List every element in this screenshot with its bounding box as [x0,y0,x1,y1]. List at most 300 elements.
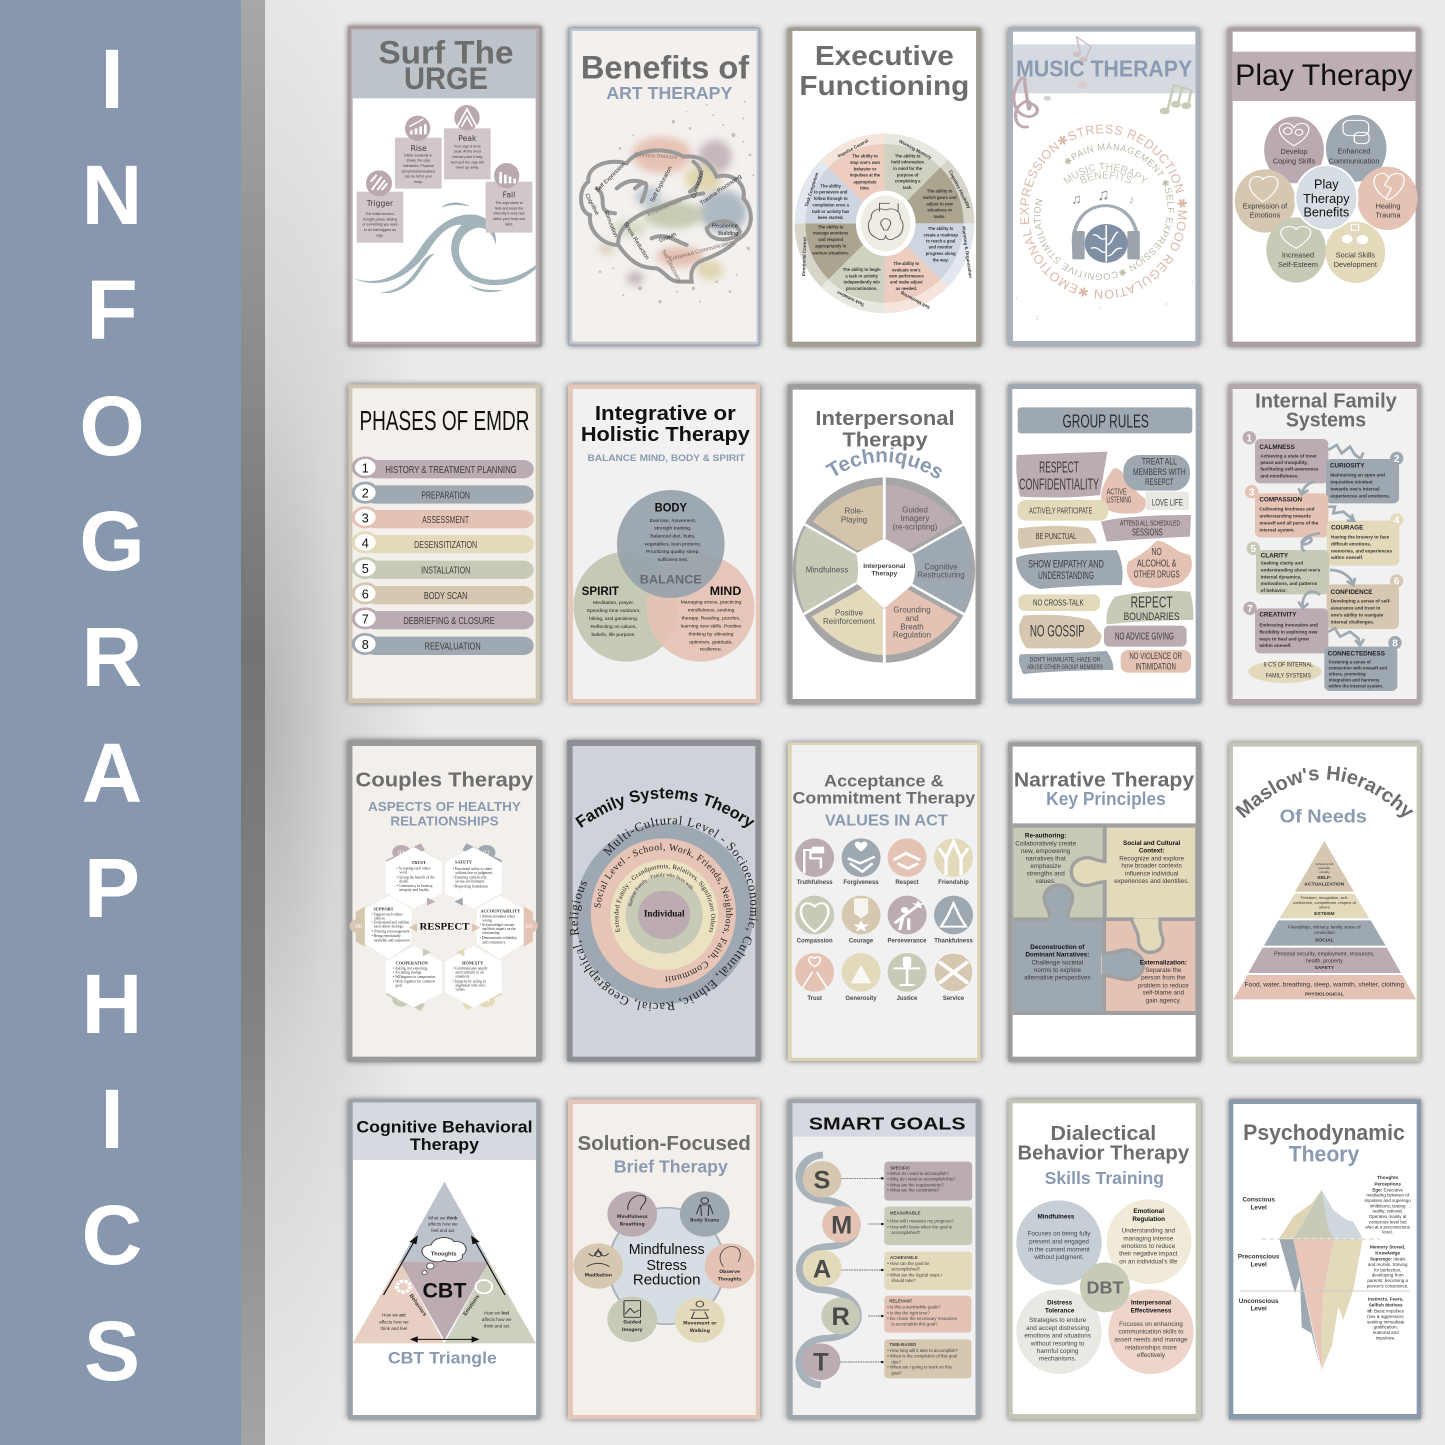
wheel labels: Reinforcement [823,617,876,626]
phase 2: PREPARATION [421,490,470,501]
box: time-based [884,1339,971,1378]
number badges: 4 [1394,516,1400,527]
wheel body text: The ability to [928,226,954,231]
triangle small text: think and feel [381,1326,407,1331]
icon: small notes: ♪ [1129,194,1134,206]
card: Maslow's Hierarchy [1224,738,1425,1066]
ego text: conscious level but [1369,1219,1407,1224]
puzzle [1013,823,1196,1015]
practice: meditation: Meditation [585,1272,612,1278]
box: curiosity: CURIOSITY [1330,463,1365,470]
step: Peak: never go away. [456,166,479,170]
box: confidence: one's ability to navigate [1331,612,1384,617]
hexagon text: and truthfully in all [455,970,484,974]
hexagon text: COOPERATION [395,960,429,965]
id text [1367,1297,1405,1340]
circular text: music therapy benefits: MUSIC THERAPY [1063,162,1148,184]
step: Fall: intensity it once had [494,212,524,216]
box: courage: Having the bravery to face [1331,535,1390,540]
venn: Spirit [573,552,679,662]
petal: Increased Self-Esteem: Self-Esteem [1278,260,1318,269]
puzzle text: re-authoring: new, empowering [1021,848,1071,855]
puzzle text: externalization: person from the [1141,975,1186,982]
hexagon text: • Understand and validate [371,921,410,925]
thought cloud [422,1238,466,1275]
sidebar vertical title INFOGRAPHICS: H [82,957,142,1051]
triangle small text: affects how we [379,1319,409,1324]
wheel body text: The ability to [927,188,953,193]
sidebar vertical title INFOGRAPHICS: N [82,148,142,242]
puzzle text: deconstruction: alternative perspectives [1024,975,1091,982]
wheel labels: Mindfulness [806,565,848,574]
card: Play Therapy [1228,28,1420,347]
phase 1 [353,458,534,478]
box: achievable: should take? [891,1278,916,1283]
triangle small text: How we feel [484,1310,509,1315]
central text: Mindfulness [629,1242,705,1258]
box: compassion: oneself and all parts of the [1259,521,1319,526]
wheel body text: The ability to [852,154,878,159]
step: Fall: fade and loses the [495,206,523,210]
brain labels: Enhanced Communication [669,240,734,263]
icon: headphones and brain [1072,206,1140,263]
number labels: 04 [483,997,490,1004]
ego text: reality; rational. [1372,1209,1403,1214]
brain outline [581,150,751,282]
hexagon text: alignment with one's [455,984,486,988]
title: Therapy [842,430,928,452]
petal: Healing Trauma [1357,167,1418,230]
practice: guided imagery: Guided [623,1319,641,1325]
wheel body text: adjust to new [926,201,954,206]
wheel segment labels: Self Monitoring [899,290,931,310]
subtitle: Theory [1289,1142,1360,1167]
wheel segment labels [801,138,973,310]
step: Peak [444,105,491,179]
hexagon text: • Work together for common [393,979,435,983]
puzzle text: re-authoring: strengths and [1026,870,1065,877]
superego text [1367,1245,1409,1288]
skill: distress tolerance: Tolerance [1045,1307,1075,1314]
icon: small notes: ♫ [1163,302,1168,308]
hexagon text: goal. [396,983,403,987]
title [799,40,969,101]
petal: Social Skills Development [1326,222,1385,283]
wheel body text: time. [860,185,870,190]
step: Trigger: Trigger [366,199,394,208]
box: specific: • What do I want to accomplish? [887,1171,949,1176]
hexagon text: • Accepting each others [396,866,431,870]
letter S [803,1161,884,1198]
card: Phases of EMDR [348,384,540,703]
title: Surf The Urge: URGE [404,61,488,96]
number badges: 1 [1247,433,1253,444]
hexagon text: situations. [455,975,470,979]
skill: distress tolerance: and accept distressing [1026,1325,1090,1332]
superego text: and morals. Striving [1368,1262,1408,1267]
card: Music Therapy [1002,24,1205,350]
rule: respect boundaries [1106,591,1193,624]
connecting arrows [1298,445,1364,646]
ego text: Perceptions [1374,1181,1401,1186]
box: confidence: internal challenges. [1331,619,1374,624]
wheel segment labels: Planning & Organization [961,226,973,279]
wheel body text: various situations. [812,250,849,255]
circular text: inner ring: ✱PAIN MANAGEMENT ✱SELF EXPRESSION ✱COGNITIVE STIMULATION [1034,143,1174,280]
icon: brain and bulb [868,203,903,240]
box: clarity: motivations, and patterns [1261,581,1318,586]
box: compassion: COMPASSION [1259,497,1303,504]
box: calmness [1255,439,1328,483]
brain labels: Self Discovery [660,249,682,284]
sidebar vertical title INFOGRAPHICS: I [100,32,124,126]
rule: show empathy [1016,550,1123,589]
header bar [1018,407,1192,433]
box: measurable: • How will I know when the goal is [887,1224,952,1229]
pyramid labels: ESTEEM [1314,911,1335,917]
wheel body text: procrastination. [846,286,877,291]
box: time-based: • When am I going to work on this [887,1365,952,1370]
skill: emotional regulation: their negative impact [1119,1251,1178,1258]
card: Family Systems Theory [562,736,766,1066]
practice: guided imagery: Imagery [622,1327,643,1333]
petal: Social Skills Development: Social Skills [1336,250,1375,259]
rule: don't humiliate: DON'T HUMILIATE, HAZE OR [1030,657,1100,664]
practice: mindfulness breathing [607,1191,657,1237]
skill: distress tolerance [1016,1289,1102,1374]
superego text: for perfection, [1374,1267,1401,1272]
title: Holistic Therapy [581,424,750,446]
hexagon text: SUPPORT [374,907,394,912]
wheel body text: behavior or [854,166,877,171]
box: time-based: • When is the completion of this goal [887,1354,957,1359]
rule: active listening: LISTENING [1106,496,1131,505]
skill: interpersonal effectiveness: effectively [1137,1352,1166,1359]
sidebar vertical title INFOGRAPHICS: A [82,726,142,820]
central ellipse [609,1208,725,1324]
ego text: level. [1382,1230,1393,1235]
ego text [1364,1175,1411,1235]
number badges: 8 [1392,638,1398,649]
wheel body text: impulses at the [850,173,881,178]
hexagon text: • Ensuring a physically [453,876,487,880]
rule: be punctual [1018,526,1097,549]
id text: Instincts, Fears, [1368,1297,1403,1302]
number badges: 6 [1394,577,1400,588]
puzzle text: externalization: self-blame and [1143,990,1185,997]
number badges: 7 [1247,604,1253,615]
value icons row 1 [795,838,973,877]
practice: observe thoughts [705,1243,755,1289]
mind text: Managing stress, practicing [681,599,742,605]
title [581,403,750,446]
hexagon text: values. [455,988,466,992]
hexagon text: TRUST [411,860,426,865]
spirit text: Spending time outdoors, [587,608,641,614]
wheel body text: The ability to [895,154,921,159]
body text: strength training. [654,526,691,532]
box: specific: • What are the constraints? [887,1188,940,1193]
ring text: Nuclear Family - Family who lives with [628,872,693,907]
wheel labels: Therapy [871,571,898,578]
box: calmness: peace and tranquility, [1260,460,1308,465]
hexagon text: • Willingness to compromise. [393,975,436,979]
rule: be punctual: BE PUNCTUAL [1036,532,1077,541]
box: measurable [884,1207,972,1245]
central text [629,1242,705,1288]
skill: mindfulness: in the current moment [1028,1246,1090,1253]
center label: Individual [644,910,685,920]
paint dots [599,97,754,303]
brain labels: Stimulation [602,210,618,238]
box: curiosity: Maintaining an open and [1330,473,1385,478]
central text: Reduction [633,1272,700,1288]
hexagon text: integrity and loyalty. [399,888,430,892]
box: creativity: within oneself. [1258,643,1292,648]
arrow triangles [409,898,480,956]
phase 3: ASSESSMENT [422,515,469,526]
sidebar vertical title INFOGRAPHICS: F [86,263,138,357]
step: Trigger: or something you want [362,223,398,227]
title: Narrative Therapy [1014,769,1195,792]
wheel body text: purpose of [897,173,919,178]
triangle small text: think and act [484,1323,510,1328]
id text: (sex & aggression; [1367,1314,1404,1319]
petal: Healing Trauma: Trauma [1376,211,1401,220]
superego text: person's conscience. [1367,1283,1409,1288]
icon: small notes: ♫ [1034,315,1039,322]
petal: Develop Coping Skills: Coping Skills [1273,156,1316,165]
rule: respect confidentiality [1016,452,1107,498]
puzzle text: externalization: gain agency. [1146,997,1181,1004]
wheel body text: manage emotions [813,231,849,236]
sidebar vertical title INFOGRAPHICS: P [84,841,140,935]
mind text: mindfulness, seeking [688,607,734,613]
rule: active listening: ACTIVE [1107,487,1127,496]
id text: impulsive. [1376,1335,1396,1340]
phase 8: 8 [362,638,369,652]
rule: treat all members: TREAT ALL [1142,456,1177,466]
puzzle text: social context: experiences and identities. [1114,878,1189,885]
rule: actively participate [1017,500,1108,521]
balance label: BALANCE [640,572,702,586]
value labels row 2: Thankfulness [934,938,973,944]
rule: no cross-talk [1018,594,1100,611]
step: Rise: Rise [411,144,427,153]
box: clarity [1256,550,1329,594]
box: relevant: to accomplish this goal? [891,1322,938,1327]
serpentine ribbon [800,1155,858,1385]
wheel body text: The ability to [818,224,844,229]
pyramid labels: SELF- [1317,875,1332,881]
skill: emotional regulation: on an individual's life [1119,1258,1178,1265]
box: courage [1327,521,1399,566]
title: Surf The Urge [378,34,513,96]
step: Rise: Either suddenly or [404,153,433,157]
hexagon text: word. [399,871,408,875]
rule: no gossip [1019,615,1102,648]
puzzle knobs [1044,858,1163,980]
value labels row 1: Forgiveness [843,880,879,886]
box: creativity: Embracing innovation and [1259,622,1318,627]
letter T [801,1343,884,1380]
petal: Increased Self-Esteem: Increased [1282,250,1314,259]
letter A [803,1250,884,1287]
side labels: Emotions [462,1294,481,1317]
box: connectedness [1324,647,1397,691]
subtitle: Brief Therapy [614,1157,728,1177]
rule: no advice giving: NO ADVICE GIVING [1115,631,1174,642]
wheel labels: Restructuring [917,571,965,580]
footer label: 8 C'S OF INTERNAL [1264,662,1313,669]
petal: Enhanced Communication: Enhanced [1337,147,1371,156]
arrows [384,1237,505,1342]
practice: movement or walking: Walking [690,1328,710,1334]
step: Rise: intensifies. Physical [403,164,434,168]
hexagon text: SAFETY [455,859,473,864]
hexagon text: choices. [374,916,386,920]
title: Surf The Urge: Surf The [378,34,513,70]
phase 4: 4 [362,536,369,550]
wheel body text: evaluate one's [892,267,921,272]
mind text [681,584,742,653]
id text: Selfish Motives [1369,1303,1403,1308]
hexagon text: wrong. [482,918,493,922]
hexagon text: each others feelings. [374,925,404,929]
number labels: 01 [398,849,405,856]
title: Commitment Therapy [793,788,976,807]
CBT label: CBT [423,1278,466,1302]
venn: Body [617,490,725,598]
wheel body text: follow through to [814,196,848,201]
level labels: Level [1251,1306,1267,1313]
puzzle text: social context: Context: [1139,848,1165,855]
circular text: outer ring: ✱STRESS REDUCTION ✱MOOD REGULATION ✱EMOTIONAL EXPRESSION [1020,124,1187,299]
body text: Balanced diet, fruits, [650,533,695,539]
wheel body text: task or activity has [812,209,850,214]
spirit text: beliefs, life purpose. [591,632,636,638]
skill: emotional regulation: Understanding and [1122,1227,1176,1234]
wheel body text: own performance [889,274,924,279]
body text: Prioritizing quality sleep, [646,549,700,555]
puzzle text: externalization: Externalization: [1140,960,1187,967]
hexagon text: • Respecting boundaries. [453,884,489,888]
title: MUSIC THERAPY [1016,56,1192,82]
brain labels: Empowerment [647,198,683,218]
box: relevant: • Is this a worthwhile goals? [887,1305,941,1310]
rule: active listening [1101,468,1146,514]
box: creativity [1255,608,1328,653]
value icons row 3 [795,953,973,992]
skill: distress tolerance: harmful coping [1037,1348,1079,1355]
title: Systems [1286,410,1366,432]
wheel body text: The ability [820,183,842,188]
puzzle text: social context: Social and Cultural [1123,840,1181,847]
practice: movement or walking [675,1297,725,1343]
petal: Increased Self-Esteem [1266,217,1326,283]
number badges [1243,431,1403,649]
value labels row 3: Service [943,996,965,1002]
value labels row 3 [807,996,965,1002]
phase 5: 5 [362,562,369,576]
rule: treat all members: RESEPCT [1145,477,1174,487]
puzzle text: externalization: problem to reduce [1138,982,1189,989]
step: Trigger [357,170,403,243]
number labels [355,849,533,1004]
box: confidence: Developing a sense of self- [1331,599,1391,604]
phase 7: 7 [362,612,369,626]
rule: attend sessions: SESSIONS [1132,527,1163,538]
puzzle text: externalization: Separate the [1145,967,1182,974]
practice: observe thoughts: Thoughts [718,1277,742,1283]
skill: interpersonal effectiveness [1108,1289,1194,1374]
wheel body text: as needed. [896,286,917,291]
wheel segment labels: Impulse Control [837,138,869,159]
triangle small text: affects how we [428,1221,458,1226]
pyramid [1233,841,1416,999]
puzzle text: social context [1114,840,1189,885]
box: clarity: Seeking clarity and [1261,561,1303,566]
rule: attend sessions [1101,515,1191,542]
value labels row 1 [797,880,969,886]
title [356,1118,533,1154]
wheel body text: appropriately in [815,244,847,249]
hexagon text: • Emotional safety to share [453,867,492,871]
center circle: Play [1314,177,1339,191]
brain labels: Trauma Processing [699,174,743,207]
box: measurable: • How will I measure my progress? [887,1219,954,1224]
value labels row 1: Friendship [938,880,969,886]
ego text: Thoughts [1377,1175,1399,1180]
level labels: Conscious [1242,1197,1275,1204]
rule: no alcohol: ALCOHOL & [1137,559,1177,570]
value labels row 1: Respect [895,880,919,886]
box: curiosity: inquisitive mindset [1330,480,1373,485]
rule: no violence: NO VIOLENCE OR [1129,651,1182,661]
petal: Expression of Emotions [1235,169,1295,233]
venn: Mind [647,555,755,662]
wheel labels: Cognitive [924,562,958,571]
title: Play Therapy [1235,59,1413,92]
value labels row 3: Generosity [845,996,877,1002]
brain labels: Self Expression [595,162,627,194]
box: relevant: • Is this the right time? [887,1310,930,1315]
wheel labels: Interpersonal [863,563,906,570]
wheel labels: Guided [902,505,928,514]
spirit text [582,584,641,638]
hexagon text: • Asking, not expecting. [393,966,428,971]
value labels row 2: Compassion [797,938,833,944]
skill: mindfulness: without judgment. [1033,1254,1084,1261]
step: Rise: can be felt in your [405,175,433,179]
ego text: impulses and superego [1364,1198,1411,1203]
petal: Social Skills Development: Development [1334,260,1377,269]
value labels row 2: Perseverance [888,938,927,944]
superego text: Superego: Ideals [1370,1257,1405,1262]
ring text: Social Level - School, Work, Friends, Neighbors, Faith, Community [594,843,733,983]
hexagon text: • Communicates openly [453,966,488,970]
practice: meditation [573,1243,623,1289]
skill: distress tolerance: emotions and situations [1024,1332,1091,1339]
id text: gratification; [1374,1325,1398,1330]
pyramid labels: potential, [1318,866,1331,870]
spirit text: Meditation, prayer. [593,600,634,606]
petal: Enhanced Communication [1326,115,1386,182]
wheel labels: (re-scripting) [893,522,938,531]
pyramid labels: confidence, competence, respect of [1293,900,1357,905]
side labels [408,1293,481,1318]
value labels row 2: Courage [849,938,874,944]
